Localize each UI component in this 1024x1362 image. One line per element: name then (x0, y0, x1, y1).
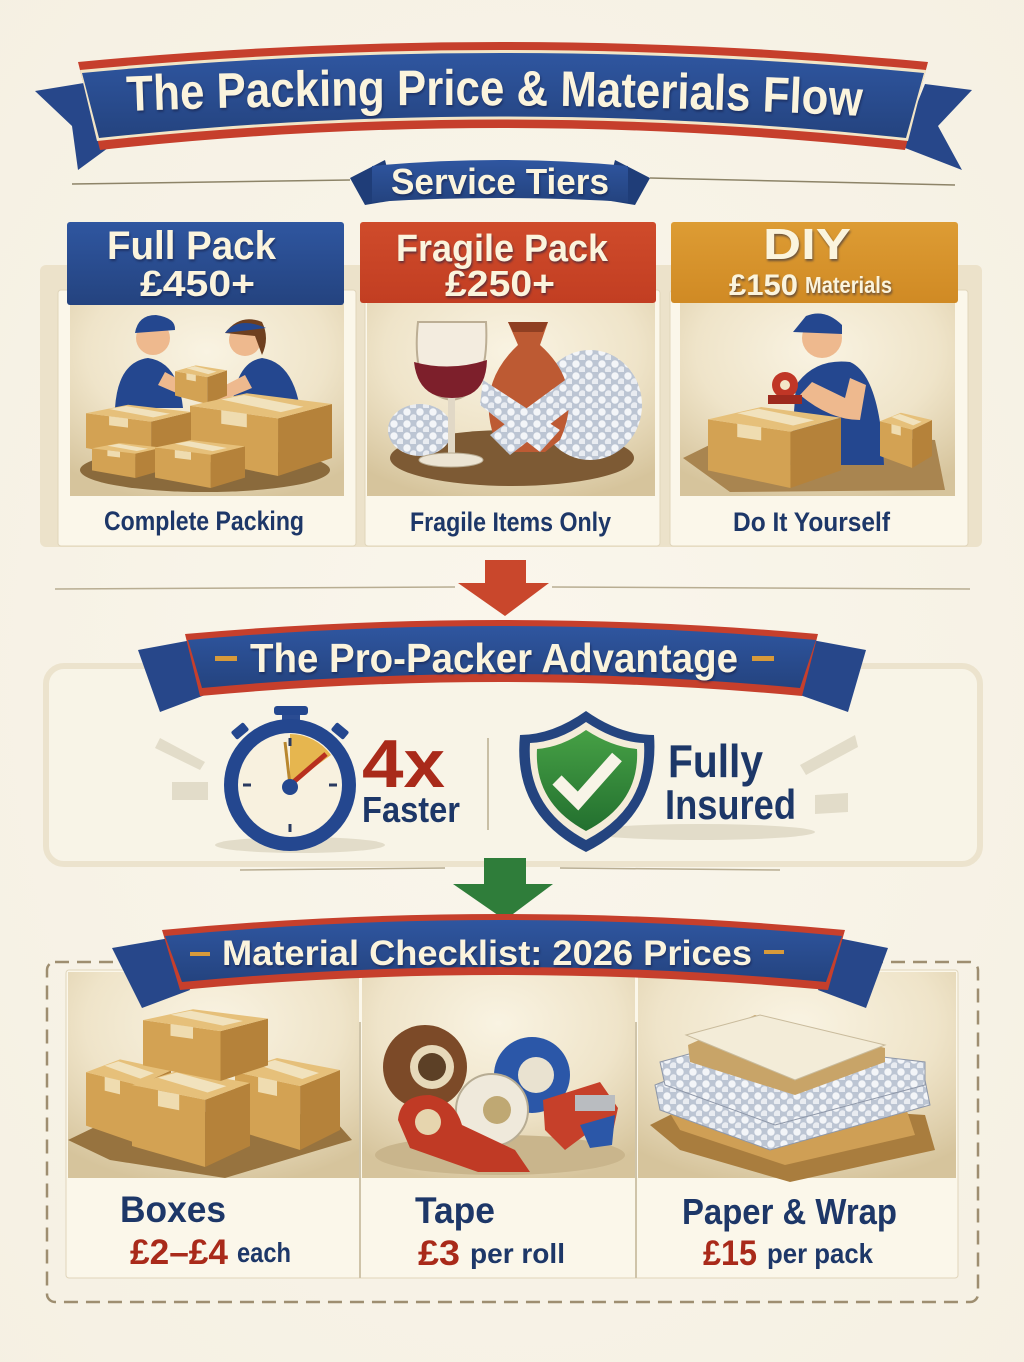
panel: pro-packer advantage (46, 620, 980, 864)
label: paper and wrap price: £15 (703, 1234, 757, 1273)
label: tape price: Tape (415, 1190, 495, 1231)
tier header: £450+ (140, 263, 255, 304)
caption: Fragile Items Only (410, 507, 611, 537)
section heading: service tiers (72, 160, 955, 205)
label: paper and wrap price: per pack (767, 1238, 873, 1269)
tier header: Materials (805, 272, 892, 298)
tier header: Fragile Pack (396, 228, 609, 270)
label: boxes price: each (237, 1237, 291, 1268)
label: tape price: per roll (470, 1238, 565, 1269)
label: paper and wrap price (682, 1191, 897, 1273)
arrow: green down arrow (240, 858, 780, 920)
arrow: red down arrow (55, 560, 970, 616)
decorative speed bursts (155, 735, 858, 853)
item: paper and wrap (638, 972, 956, 1273)
title banner (35, 42, 972, 170)
stat: 4x faster: 4x (362, 726, 445, 802)
tier header: Full Pack (107, 224, 277, 268)
label: boxes price: £2–£4 (130, 1233, 229, 1272)
section heading: material checklist: Material Checklist: 2026 Prices (222, 934, 752, 973)
illustration: wine glass and wrapped vase (367, 303, 655, 496)
item: boxes (68, 972, 359, 1272)
illustration: person taping a box (680, 303, 955, 496)
item: tape (362, 972, 635, 1273)
panel: Full Pack tier (58, 222, 356, 546)
tier header (360, 222, 656, 304)
section heading: material checklist (112, 914, 888, 1008)
caption: Do It Yourself (733, 507, 891, 537)
label: tape price (415, 1190, 565, 1273)
stat: fully insured (665, 735, 796, 828)
illustration: two packers with boxes (70, 304, 344, 496)
stat: 4x faster (362, 726, 460, 830)
stat: fully insured: Insured (665, 781, 796, 828)
panel: DIY tier (670, 220, 968, 546)
panel: material checklist (47, 914, 978, 1302)
icon: stopwatch (224, 706, 356, 851)
label: boxes price (120, 1189, 291, 1272)
panel: Fragile Pack tier (360, 222, 660, 546)
tier header (67, 222, 344, 305)
icon: insurance shield (519, 711, 654, 852)
stat: fully insured: Fully (668, 735, 763, 787)
label: boxes price: Boxes (120, 1189, 226, 1230)
label: paper and wrap price: Paper & Wrap (682, 1191, 897, 1232)
tier header (671, 220, 958, 303)
stat: 4x faster: Faster (362, 789, 460, 830)
tier header: DIY (763, 220, 851, 269)
section heading: pro-packer advantage (138, 620, 866, 712)
tier header: £150 (729, 269, 798, 302)
back panel behind tier cards (40, 265, 982, 547)
section heading: pro-packer advantage: The Pro-Packer Advantage (250, 635, 738, 681)
caption: Complete Packing (104, 506, 304, 536)
title text: The Packing Price & Materials Flow (126, 68, 864, 120)
section heading: service tiers: Service Tiers (391, 161, 609, 202)
tier header: £250+ (445, 263, 555, 304)
label: tape price: £3 (418, 1234, 460, 1273)
